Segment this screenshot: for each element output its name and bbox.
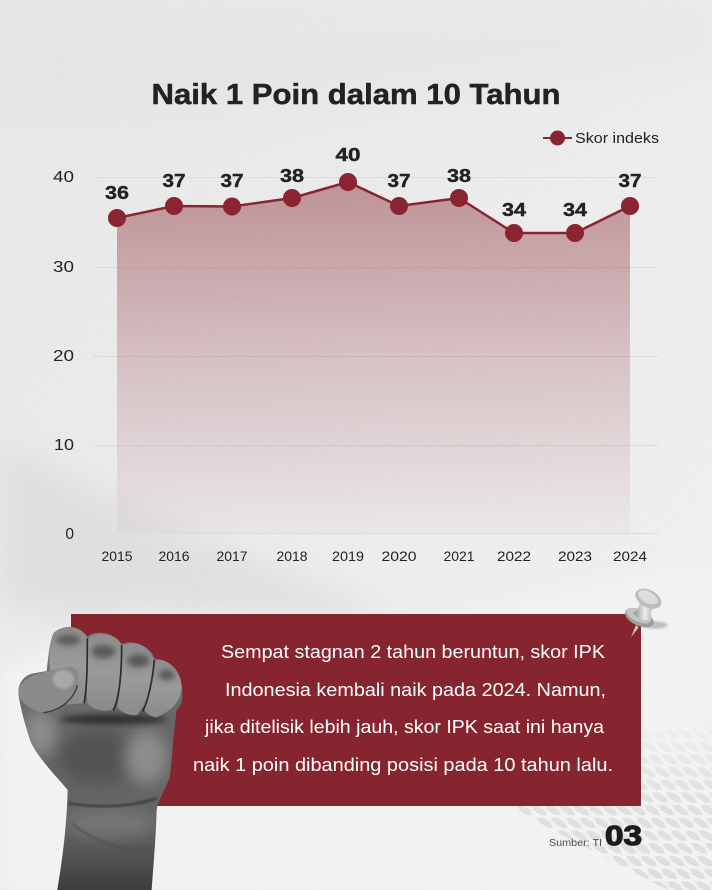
value labels: 37 bbox=[162, 170, 186, 191]
x axis years: 2021 bbox=[444, 548, 475, 564]
illustration: raised fist bbox=[13, 620, 187, 890]
page number: 03 bbox=[605, 820, 642, 851]
source note: Sumber: TI bbox=[549, 838, 602, 849]
value labels: 36 bbox=[105, 182, 129, 203]
x axis years bbox=[102, 548, 647, 564]
x axis years: 2018 bbox=[276, 548, 308, 564]
panel: callout bbox=[71, 614, 641, 806]
fingers bbox=[49, 627, 87, 705]
value labels: 38 bbox=[280, 165, 304, 186]
legend bbox=[543, 130, 659, 147]
grid lines and y axis: 20 bbox=[53, 348, 74, 365]
grid lines and y axis: 0 bbox=[65, 526, 74, 543]
x axis years: 2023 bbox=[558, 548, 592, 564]
value labels bbox=[105, 144, 642, 220]
score line bbox=[117, 182, 630, 233]
x axis years: 2020 bbox=[382, 548, 417, 564]
palm shading bbox=[62, 729, 124, 784]
value labels: 37 bbox=[220, 170, 244, 191]
value labels: 34 bbox=[502, 199, 527, 220]
icon: push pin bbox=[622, 584, 668, 637]
x axis years: 2015 bbox=[102, 548, 133, 564]
x axis years: 2022 bbox=[497, 548, 531, 564]
callout text bbox=[193, 642, 613, 775]
line chart bbox=[53, 144, 658, 564]
callout text: naik 1 poin dibanding posisi pada 10 tahun lalu. bbox=[193, 755, 613, 775]
knuckle shadows bbox=[56, 635, 175, 680]
value labels: 37 bbox=[618, 170, 642, 191]
value labels: 40 bbox=[336, 144, 360, 165]
x axis years: 2016 bbox=[158, 548, 190, 564]
callout text: jika ditelisik lebih jauh, skor IPK saat ini hanya bbox=[204, 717, 605, 737]
x axis years: 2017 bbox=[216, 548, 248, 564]
grid lines and y axis: 40 bbox=[53, 169, 74, 186]
grid lines and y axis bbox=[53, 169, 658, 543]
title: Naik 1 Poin dalam 10 Tahun bbox=[152, 79, 560, 111]
value labels: 38 bbox=[447, 165, 471, 186]
data points bbox=[108, 173, 639, 242]
grid lines and y axis: 30 bbox=[53, 259, 74, 276]
x axis years: 2024 bbox=[613, 548, 647, 564]
value labels: 34 bbox=[563, 199, 588, 220]
grid lines and y axis: 10 bbox=[54, 437, 74, 454]
callout text: Indonesia kembali naik pada 2024. Namun, bbox=[225, 680, 606, 700]
value labels: 37 bbox=[388, 170, 410, 191]
x axis years: 2019 bbox=[332, 548, 364, 564]
legend: Skor indeks bbox=[575, 130, 659, 147]
callout text: Sempat stagnan 2 tahun beruntun, skor IPK bbox=[221, 642, 605, 662]
area fill bbox=[117, 182, 630, 533]
finger creases bbox=[84, 638, 154, 712]
thumb bbox=[18, 667, 78, 713]
